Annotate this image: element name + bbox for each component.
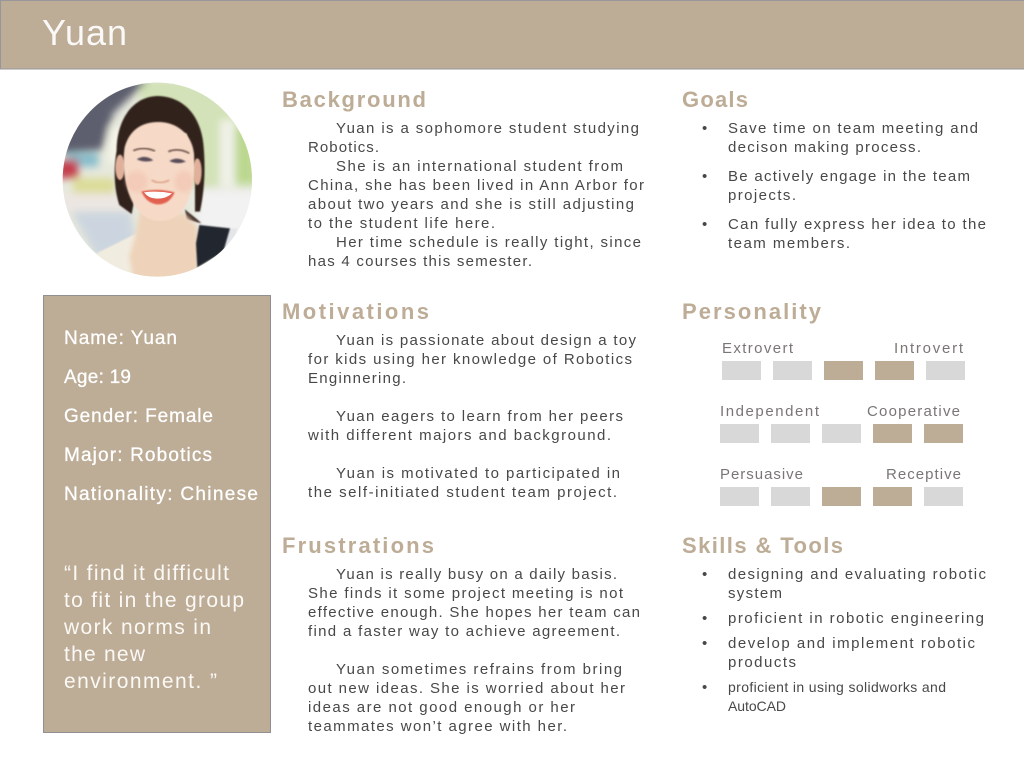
panel: skills and tools	[682, 533, 986, 714]
goals list: Be actively engage in the team	[728, 168, 970, 185]
background text: She is an international student from	[336, 158, 623, 175]
profile facts: Age: 19	[64, 367, 131, 388]
scale: persuasive to receptive: Receptive	[886, 466, 961, 483]
ears	[115, 155, 125, 180]
skills list: system	[728, 585, 782, 602]
profile facts	[64, 328, 258, 505]
frustrations text: Yuan sometimes refrains from bring	[336, 661, 622, 678]
frustrations text: ideas are not good enough or her	[308, 699, 575, 716]
mouth	[141, 190, 175, 204]
frustrations text: Yuan is really busy on a daily basis.	[336, 566, 617, 583]
scale: independent to cooperative: Cooperative	[867, 403, 960, 420]
profile facts: Name: Yuan	[64, 328, 177, 349]
face	[124, 122, 194, 221]
heading: motivations: Motivations	[282, 299, 429, 324]
panel: profile card	[44, 296, 270, 732]
motivations text	[307, 332, 636, 501]
scale: independent to cooperative: Independent	[720, 403, 820, 420]
frustrations text: effective enough. She hopes her team can	[308, 604, 640, 621]
goals list: Save time on team meeting and	[728, 120, 978, 137]
background text: has 4 courses this semester.	[308, 253, 532, 270]
skills list: products	[728, 654, 796, 671]
scale: persuasive to receptive	[720, 466, 963, 506]
hair	[115, 96, 205, 214]
goals list: projects.	[728, 187, 796, 204]
profile facts: Nationality: Chinese	[64, 484, 258, 505]
heading: personality: Personality	[682, 299, 822, 324]
skills list: •	[702, 566, 707, 583]
motivations text: Yuan eagers to learn from her peers	[336, 408, 623, 425]
skills list: proficient in using solidworks and	[728, 679, 946, 695]
background text: Robotics.	[308, 139, 379, 156]
motivations text: for kids using her knowledge of Robotics	[308, 351, 632, 368]
goals list: Can fully express her idea to the	[728, 216, 986, 233]
motivations text: with different majors and background.	[307, 427, 611, 444]
title: Yuan	[42, 12, 127, 53]
skills list: •	[702, 610, 707, 627]
scale: persuasive to receptive: Persuasive	[720, 466, 803, 483]
background text: Yuan is a sophomore student studying	[336, 120, 639, 137]
heading: frustrations: Frustrations	[282, 533, 434, 558]
motivations text: Yuan is passionate about design a toy	[336, 332, 636, 349]
quote: to fit in the group	[64, 589, 244, 612]
goals list: team members.	[728, 235, 850, 252]
motivations text: the self-initiated student team project.	[308, 484, 617, 501]
skills list: designing and evaluating robotic	[728, 566, 986, 583]
goals list: •	[702, 168, 707, 185]
scale: extrovert to introvert: Introvert	[894, 340, 964, 357]
skills list: develop and implement robotic	[728, 635, 976, 652]
neck and chest	[129, 210, 198, 280]
background text: China, she has been lived in Ann Arbor for	[308, 177, 644, 194]
goals list: decison making process.	[728, 139, 921, 156]
heading: goals: Goals	[682, 87, 748, 112]
header banner	[0, 0, 1024, 69]
scale: extrovert to introvert	[722, 340, 965, 380]
motivations text: Yuan is motivated to participated in	[336, 465, 620, 482]
quote: environment. ”	[64, 670, 217, 693]
panel: goals	[682, 87, 986, 252]
motivations text: Enginnering.	[308, 370, 406, 387]
scale: extrovert to introvert: Extrovert	[722, 340, 794, 357]
skills list: •	[702, 635, 707, 652]
goals list: •	[702, 216, 707, 233]
background text: to the student life here.	[308, 215, 495, 232]
skills list	[702, 566, 986, 714]
profile facts: Gender: Female	[64, 406, 213, 427]
skills list: proficient in robotic engineering	[728, 610, 984, 627]
quote: work norms in	[63, 616, 211, 639]
scale: independent to cooperative	[720, 403, 963, 443]
background text	[308, 120, 644, 270]
skills list: •	[702, 679, 707, 696]
quote	[63, 562, 244, 693]
goals list: •	[702, 120, 707, 137]
frustrations text: teammates won’t agree with her.	[308, 718, 567, 735]
portrait photo	[57, 80, 260, 280]
panel: personality	[682, 299, 965, 506]
skills list: AutoCAD	[728, 698, 786, 714]
panel: motivations	[282, 299, 636, 501]
heading: skills and tools: Skills & Tools	[682, 533, 843, 558]
profile facts: Major: Robotics	[64, 445, 212, 466]
nose shadow	[152, 180, 169, 183]
frustrations text	[308, 566, 640, 735]
background text: about two years and she is still adjusting	[308, 196, 634, 213]
frustrations text: find a faster way to achieve agreement.	[308, 623, 620, 640]
backpack strap	[196, 225, 230, 267]
panel: background	[282, 87, 644, 270]
clothing	[96, 234, 136, 272]
frustrations text: She finds it some project meeting is not	[308, 585, 624, 602]
frustrations text: out new ideas. She is worried about her	[308, 680, 625, 697]
heading: background: Background	[282, 87, 426, 112]
quote: “I find it difficult	[64, 562, 229, 585]
background text: Her time schedule is really tight, since	[336, 234, 641, 251]
goals list	[702, 120, 986, 252]
panel: frustrations	[282, 533, 640, 735]
brows and eyes	[133, 148, 155, 151]
quote: the new	[64, 643, 146, 666]
